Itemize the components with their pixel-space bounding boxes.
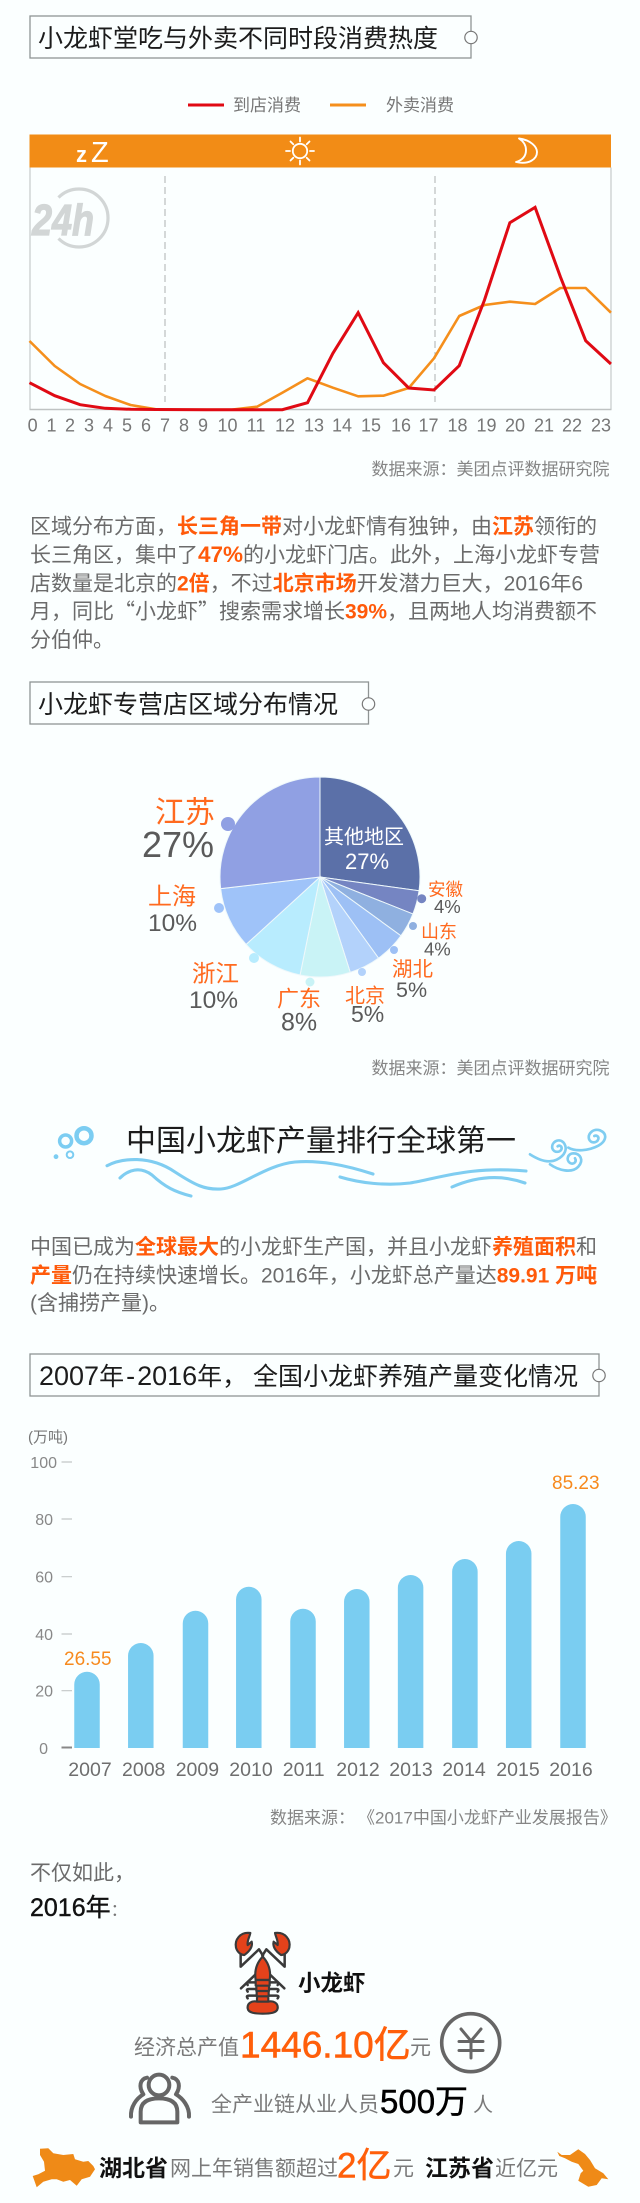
line: takeaway	[30, 288, 611, 410]
stat: workforce: 500万	[380, 2083, 468, 2120]
hour axis labels: 8	[179, 416, 189, 436]
text block: regional distribution	[30, 516, 600, 652]
label: other regions: 27%	[345, 849, 389, 874]
year labels: 2007	[68, 1759, 112, 1781]
icon: sleep zZ	[76, 137, 109, 169]
year labels: 2011	[283, 1759, 325, 1781]
hour axis labels: 14	[332, 416, 352, 436]
year labels: 2009	[176, 1759, 219, 1781]
hour axis labels: 2	[65, 416, 75, 436]
text block: world's largest producer	[30, 1235, 597, 1315]
label: other regions	[324, 826, 404, 874]
icon: sleep zZ: Z	[91, 137, 109, 169]
hour axis labels: 13	[304, 416, 324, 436]
hour axis labels: 10	[217, 416, 238, 436]
line: dine-in	[30, 207, 611, 410]
source note 1: 数据来源：美团点评数据研究院	[372, 460, 610, 479]
legend: 外卖消费	[386, 96, 454, 115]
hour axis labels: 1	[46, 416, 57, 436]
y axis: 100	[30, 1455, 57, 1472]
label: Guangdong: 8%	[281, 1008, 317, 1036]
year labels: 2016	[549, 1759, 593, 1781]
source note 3: 数据来源：	[270, 1808, 355, 1828]
stat: workforce: 人	[473, 2094, 493, 2116]
text block: regional distribution: 店数量是北京的2倍，不过北京市场开发潜力巨大，2016年6	[30, 572, 583, 596]
year labels	[68, 1759, 593, 1781]
label: Zhejiang: 浙江	[192, 960, 239, 986]
map: Jiangsu	[557, 2149, 608, 2187]
hour axis labels: 15	[361, 416, 381, 436]
heading: dine-in vs takeaway heat	[30, 16, 477, 58]
y axis: 60	[35, 1570, 53, 1586]
stat: economic output: 元	[410, 2036, 431, 2060]
stat: online sales: 江苏省	[425, 2155, 494, 2181]
value labels	[64, 1473, 600, 1670]
label: Anhui: 安徽	[428, 880, 463, 900]
hour axis labels: 4	[103, 416, 113, 436]
pie slices	[220, 777, 420, 977]
label: Shanghai	[148, 884, 197, 937]
time-of-day band	[30, 134, 611, 169]
stat: online sales: 网上年销售额超过	[170, 2158, 338, 2180]
text: moreover: 不仅如此，	[30, 1862, 135, 1885]
text block: regional distribution: 月，同比“小龙虾”搜索需求增长39%，且两地人均消费额不	[30, 596, 597, 626]
icon: lobster	[236, 1933, 290, 2014]
hour axis labels: 23	[591, 416, 611, 436]
text: 2016: 2016年：	[30, 1894, 128, 1922]
label: Shandong	[421, 922, 457, 960]
label: Beijing	[345, 984, 385, 1027]
label: Shandong: 4%	[424, 938, 451, 960]
label: Zhejiang: 10%	[189, 987, 238, 1014]
hour axis labels: 17	[418, 416, 439, 436]
legend: 到店消费	[233, 96, 301, 115]
hour axis labels: 18	[447, 416, 468, 436]
label: Anhui	[428, 880, 463, 917]
year labels: 2008	[122, 1759, 165, 1781]
stat: online sales: 近亿元	[495, 2158, 558, 2180]
hour axis labels: 6	[141, 416, 151, 436]
stat: online sales	[99, 2146, 558, 2186]
y axis: 80	[35, 1512, 53, 1529]
heading: China ranks first in production, with wave decoration	[54, 1125, 605, 1196]
icon: waves	[107, 1160, 526, 1196]
hour axis labels: 12	[275, 416, 295, 436]
stat: economic output: 1446.10亿	[240, 2024, 411, 2066]
icon: moon	[516, 138, 537, 163]
label: Shanghai: 上海	[148, 884, 196, 910]
text block: regional distribution: 区域分布方面，长三角一带对小龙虾情有独钟，由江苏领衔的	[30, 516, 597, 538]
bar chart: annual output	[28, 1429, 600, 1781]
heading: store regional distribution	[30, 682, 375, 724]
source note 3: 《2017中国小龙虾产业发展报告》	[358, 1808, 617, 1828]
year labels: 2012	[336, 1759, 380, 1781]
label: Guangdong: 广东	[277, 986, 321, 1012]
label: Beijing: 5%	[351, 1001, 384, 1027]
heading: output change 2007-2016	[30, 1354, 605, 1396]
stat: workforce: 全产业链从业人员	[211, 2094, 379, 2116]
value labels: 85.23	[552, 1473, 600, 1494]
hour axis labels: 19	[476, 416, 497, 436]
hour axis labels: 3	[84, 416, 94, 436]
text block: regional distribution: 长三角区，集中了47%的小龙虾门店。此外，上海小龙虾专营	[30, 542, 600, 567]
y axis: 20	[35, 1684, 53, 1700]
icon: 24h: 24h	[31, 196, 94, 245]
label: Beijing: 北京	[345, 984, 385, 1008]
text block: world's largest producer: 中国已成为全球最大的小龙虾生产国，并且小龙虾养殖面积和	[30, 1235, 597, 1259]
year labels: 2010	[229, 1759, 273, 1781]
icon: people	[131, 2075, 189, 2122]
year labels: 2013	[389, 1759, 433, 1781]
icon: yuan coin	[442, 2014, 500, 2072]
label: lobster: 小龙虾	[298, 1971, 366, 1996]
pie label dots	[214, 817, 426, 986]
icon: swirl	[530, 1130, 605, 1171]
hour axis labels: 11	[247, 416, 265, 436]
stat: online sales: 湖北省	[99, 2155, 168, 2181]
text block: world's largest producer: 产量仍在持续快速增长。2016年，小龙虾总产量达89.91 万吨	[30, 1264, 597, 1288]
label: Hubei	[392, 958, 433, 1002]
text block: regional distribution: 分伯仲。	[30, 629, 114, 652]
y axis: 40	[35, 1627, 53, 1644]
heading: China ranks first in production, with wave decoration: 中国小龙虾产量排行全球第一	[126, 1125, 516, 1158]
icon: sleep zZ: z	[76, 142, 87, 167]
line chart: consumption heat over 24 hours	[28, 134, 612, 436]
label: Zhejiang	[189, 960, 239, 1014]
label: Anhui: 4%	[434, 896, 461, 917]
value labels: 26.55	[64, 1649, 112, 1670]
hour axis labels: 9	[198, 416, 208, 436]
stat: economic output	[134, 2024, 431, 2066]
heading: dine-in vs takeaway heat: 小龙虾堂吃与外卖不同时段消费热度	[38, 25, 438, 53]
y axis: 0	[39, 1741, 48, 1758]
stat: economic output: 经济总产值	[134, 2036, 239, 2060]
heading: store regional distribution: 小龙虾专营店区域分布情况	[38, 691, 338, 719]
hour axis labels: 21	[534, 416, 554, 436]
label: Jiangsu: 江苏	[155, 796, 215, 830]
hour axis labels: 20	[505, 416, 525, 436]
text block: world's largest producer: (含捕捞产量)。	[30, 1292, 170, 1315]
label: Hubei: 5%	[396, 978, 427, 1002]
label: other regions: 其他地区	[324, 826, 404, 848]
pie chart: regional share	[142, 777, 463, 1036]
label: Hubei: 湖北	[392, 958, 433, 981]
hour axis labels: 0	[28, 416, 38, 436]
hour axis labels: 22	[562, 416, 582, 436]
label: Jiangsu	[142, 796, 215, 865]
map: Hubei	[33, 2148, 95, 2187]
icon: bubbles	[54, 1128, 92, 1159]
hour axis labels	[28, 416, 611, 436]
label: Jiangsu: 27%	[142, 824, 214, 865]
hour axis labels: 16	[391, 416, 411, 436]
label: Shanghai: 10%	[148, 910, 197, 937]
stat: online sales: 2亿	[337, 2146, 391, 2186]
bars	[74, 1504, 586, 1748]
hour axis labels: 7	[160, 416, 170, 436]
year labels: 2014	[442, 1759, 486, 1781]
heading: output change 2007-2016: 2007年-2016年，	[39, 1361, 247, 1391]
stat: workforce	[211, 2083, 493, 2120]
icon: sun	[286, 138, 314, 164]
hour axis labels: 5	[122, 416, 132, 436]
legend	[188, 96, 454, 115]
y axis	[30, 1455, 72, 1758]
year labels: 2015	[496, 1759, 540, 1781]
label: Shandong: 山东	[421, 922, 457, 942]
label: Guangdong	[277, 986, 321, 1036]
source note 2: 数据来源：美团点评数据研究院	[372, 1059, 610, 1078]
unit label: (万吨)	[28, 1429, 68, 1446]
heading: output change 2007-2016: 全国小龙虾养殖产量变化情况	[253, 1363, 578, 1391]
stat: online sales: 元	[393, 2158, 414, 2180]
